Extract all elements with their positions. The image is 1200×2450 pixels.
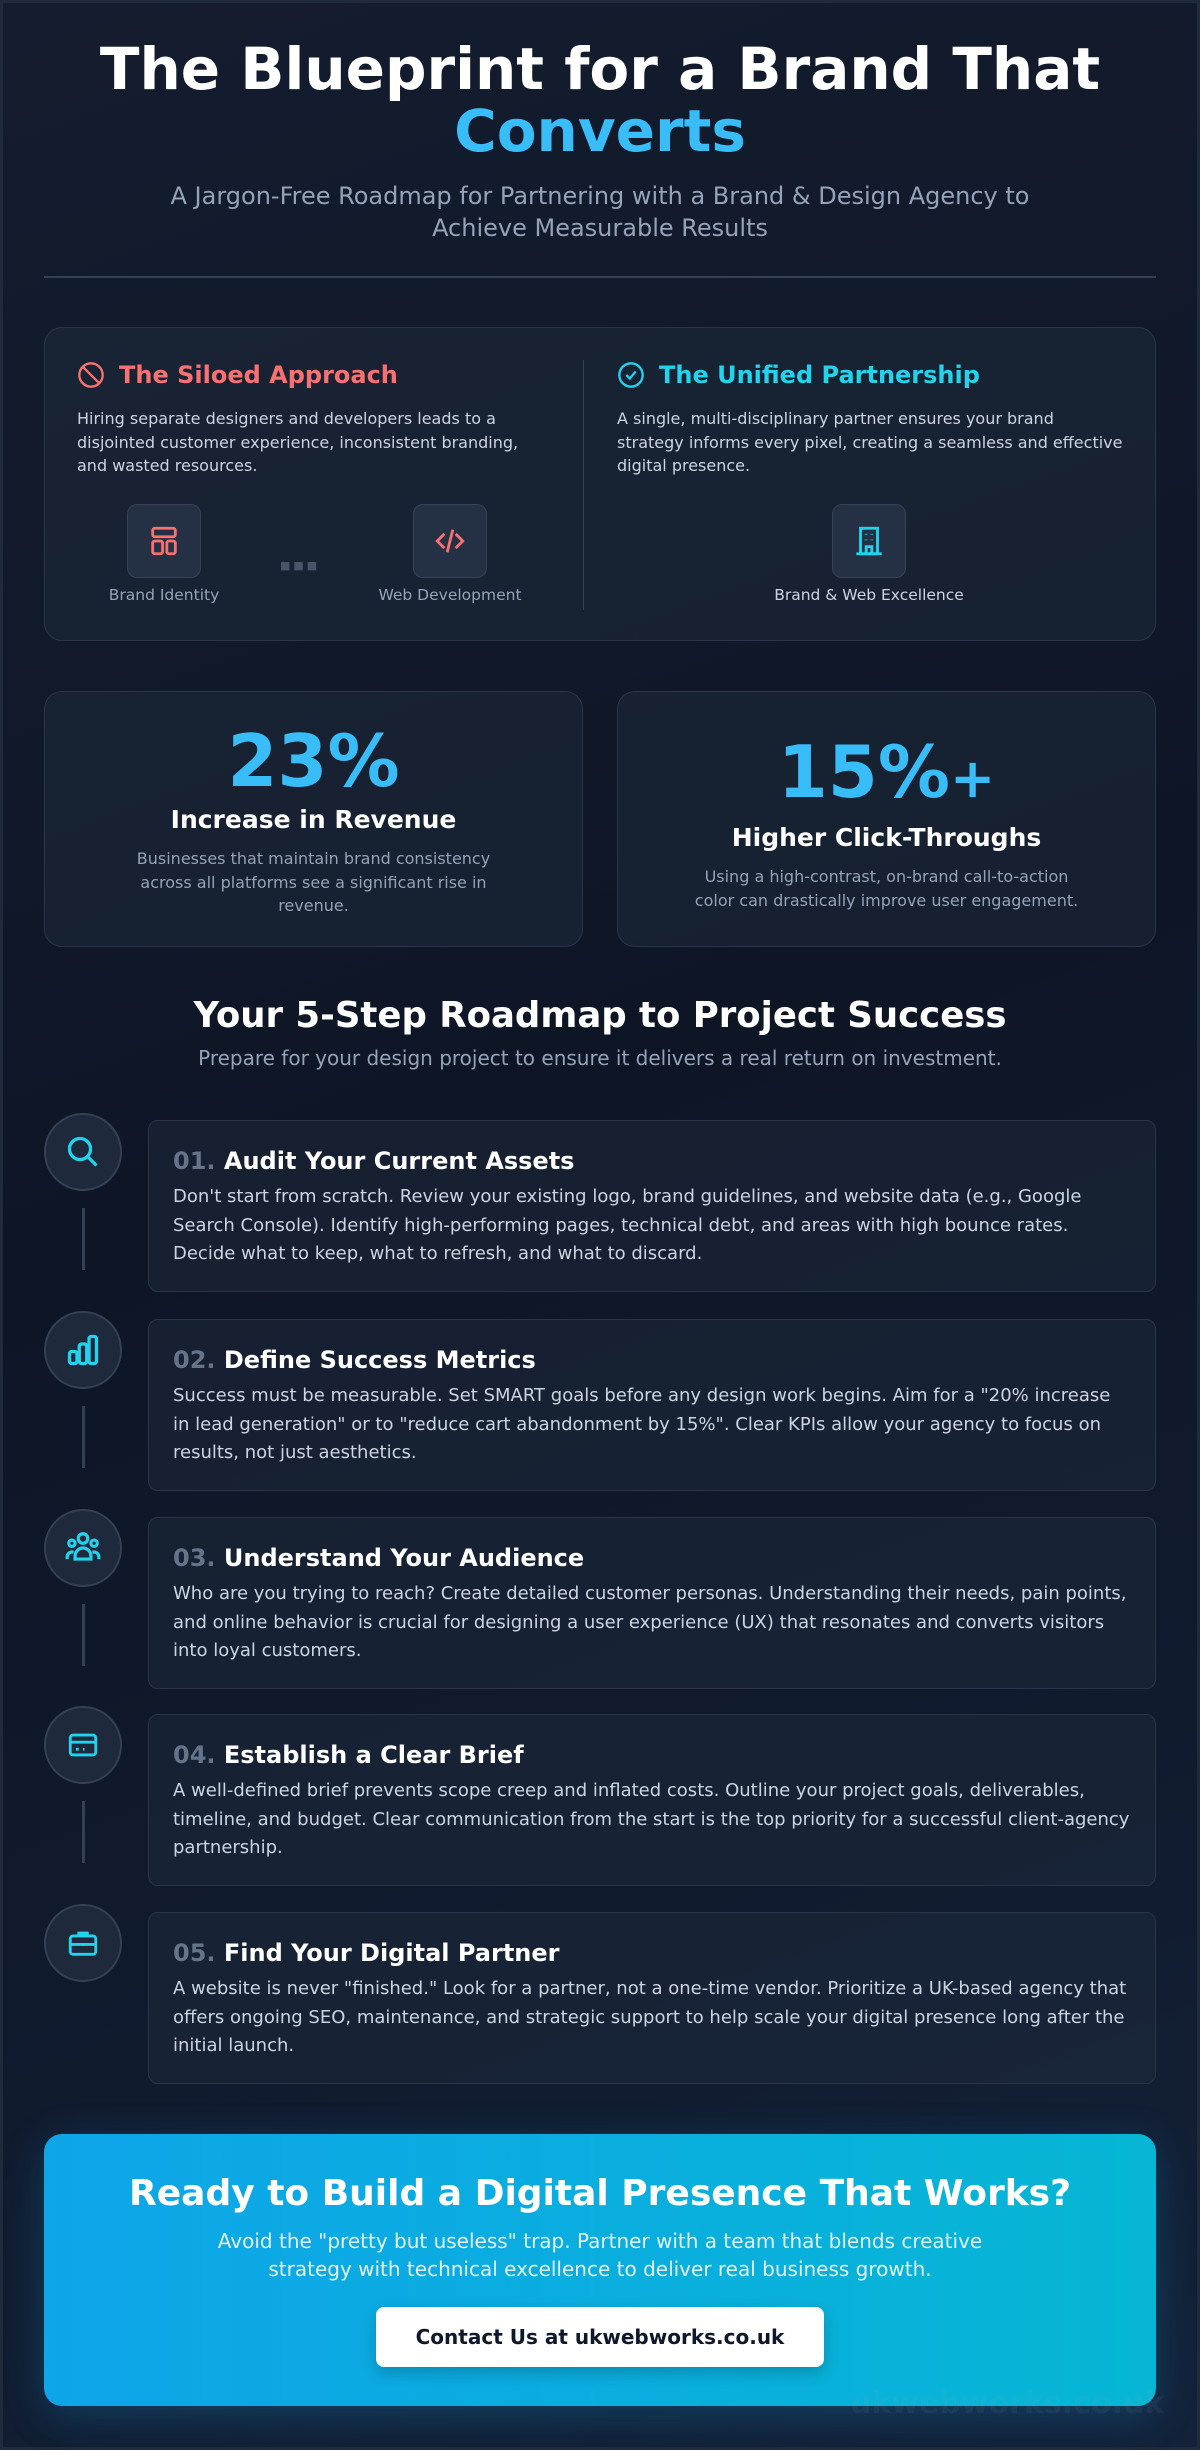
CTA panel	[44, 2134, 1156, 2406]
step 2	[148, 1319, 1156, 1491]
subtitle: A Jargon-Free Roadmap for Partnering with a Brand & Design Agency to Achieve Measurable Results	[170, 182, 1029, 242]
step 2: 02. Define Success Metrics	[173, 1346, 536, 1374]
text: siloed: Hiring separate designers and developers leads to a disjointed customer experience, inconsistent branding, and wasted resources.	[77, 409, 518, 475]
step 2: Success must be measurable. Set SMART goals before any design work begins. Aim for a "20% increase	[173, 1385, 1110, 1406]
stat: 15%+	[617, 691, 1156, 947]
roadmap subtitle: Prepare for your design project to ensure it delivers a real return on investment.	[198, 1046, 1002, 1070]
step 5: A website is never "finished." Look for a partner, not a one-time vendor. Prioritize a UK-based agency that offers ongoing SEO, maintenance, and strategic support to help scale your digital presence long after the initial launch.	[173, 1978, 1126, 2056]
title	[100, 35, 1100, 165]
CTA button: Contact Us at ukwebworks.co.uk	[416, 2325, 784, 2349]
icon: step4 card	[44, 1706, 122, 1784]
text: unified: strategy informs every pixel, creating a seamless and effective digital presence.	[617, 432, 1122, 475]
stat: 23%: Businesses that maintain brand consistency across all platforms see a significant rise in revenue.	[137, 849, 490, 915]
icon: brand identity	[127, 504, 201, 578]
dots: ■■■	[280, 559, 320, 572]
watermark: ukwebworks.co.uk	[850, 2386, 1164, 2421]
CTA text: Avoid the "pretty but useless" trap. Partner with a team that blends creative strategy with technical excellence to deliver real business growth.	[218, 2229, 982, 2281]
step 1	[148, 1120, 1156, 1292]
stat: 23%	[44, 691, 583, 947]
panel: comparison: Brand & Web Excellence	[774, 586, 964, 604]
icon: step5 briefcase	[44, 1904, 122, 1982]
step 2: in lead generation" or to "reduce cart abandonment by 15%". Clear KPIs allow your agency to focus on results, not just aesthetics.	[173, 1414, 1101, 1463]
heading: unified partnership: The Unified Partnership	[659, 361, 980, 389]
stat: 15%+: 15%+	[778, 730, 995, 814]
icon: step3 users	[44, 1509, 122, 1587]
stat: 15%+: Higher Click-Throughs	[732, 823, 1041, 852]
step 4: A well-defined brief prevents scope creep and inflated costs. Outline your project goals, deliverables, timeline, and budget. Clear communication from the start is the top priority for a successful client-agency partnership.	[173, 1780, 1129, 1858]
panel: comparison: Brand Identity	[109, 586, 219, 604]
title: The Blueprint for a Brand That	[100, 35, 1100, 103]
step 3	[148, 1517, 1156, 1689]
step 4	[148, 1714, 1156, 1886]
roadmap heading: Your 5-Step Roadmap to Project Success	[193, 995, 1007, 1036]
heading: siloed approach: The Siloed Approach	[119, 361, 398, 389]
CTA heading: Ready to Build a Digital Presence That Works?	[129, 2173, 1071, 2214]
icon: web development	[413, 504, 487, 578]
step 3: 03. Understand Your Audience	[173, 1544, 584, 1572]
step 1: Don't start from scratch. Review your existing logo, brand guidelines, and website data (e.g., Google Search Console). Identify high-performing pages, technical debt, and areas with high bounce rates. Decide what to keep, what to refresh, and what to discard.	[173, 1186, 1081, 1264]
stat: 15%+: Using a high-contrast, on-brand call-to-action color can drastically improve user engagement.	[695, 867, 1078, 910]
text: unified	[617, 409, 1122, 475]
panel: comparison: Web Development	[378, 586, 522, 604]
icon: building	[832, 504, 906, 578]
CTA button	[376, 2307, 824, 2367]
stat: 23%: 23%	[227, 719, 400, 803]
stat: 23%: Increase in Revenue	[171, 805, 456, 834]
panel: comparison	[44, 327, 1156, 641]
text: unified: A single, multi-disciplinary partner ensures your brand	[617, 409, 1054, 428]
step 5	[148, 1912, 1156, 2084]
step 5: 05. Find Your Digital Partner	[173, 1939, 560, 1967]
title: Converts	[454, 97, 746, 165]
icon: step1 search	[44, 1113, 122, 1191]
step 1: 01. Audit Your Current Assets	[173, 1147, 574, 1175]
step 4: 04. Establish a Clear Brief	[173, 1741, 524, 1769]
step 3: Who are you trying to reach? Create detailed customer personas. Understanding their needs, pain points, and online behavior is crucial for designing a user experience (UX) that resonates and converts visitors into loyal customers.	[173, 1583, 1126, 1661]
icon: step2 chart	[44, 1311, 122, 1389]
